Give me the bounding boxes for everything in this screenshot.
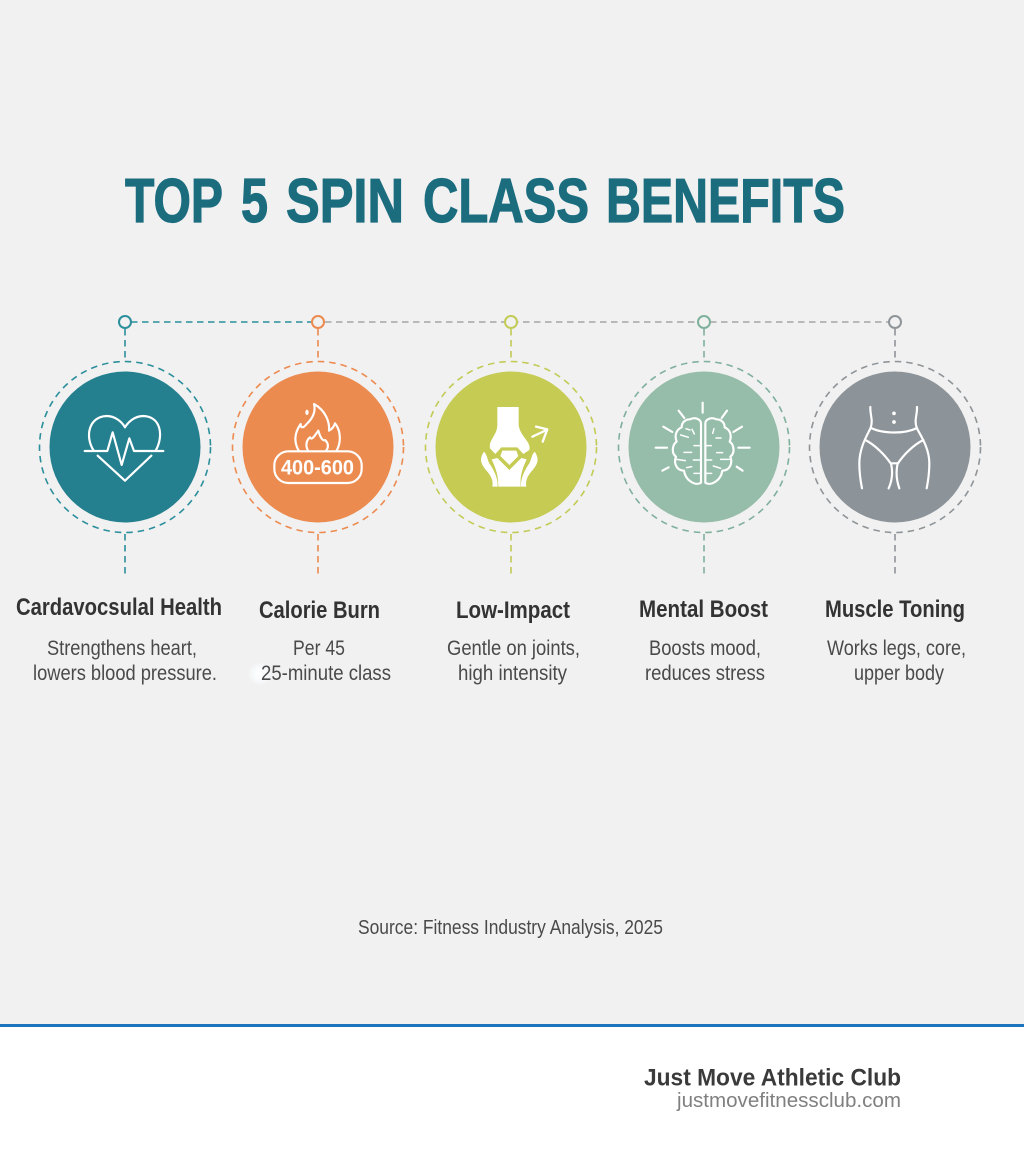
icon: brain with rays [656,403,750,484]
description [827,637,966,685]
description [248,637,391,686]
panel: mental boost [618,316,790,685]
timeline node [312,316,324,328]
description: 25-minute class [261,662,391,685]
panel: cardiovascular health [16,316,222,685]
description [645,637,765,685]
panel: muscle toning [810,316,980,685]
title: 5 [241,167,268,236]
heading: Mental Boost [639,596,768,623]
description: Gentle on joints, [447,637,580,660]
title: TOP [125,167,223,236]
timeline node [889,316,901,328]
icon: flame with calorie badge: 400-600 [281,455,354,479]
heading: Low-Impact [456,597,570,624]
title: SPIN [286,167,404,236]
icon: waist and hips [859,407,929,488]
title: CLASS [423,167,589,236]
title [125,167,845,236]
icon: knee joint with arrow [481,407,547,487]
description: Strengthens heart, [47,637,197,660]
club name: Just Move Athletic Club [644,1064,901,1092]
timeline node [698,316,710,328]
heading: Calorie Burn [259,597,380,624]
panel: calorie burn [232,316,404,686]
icon: flame with calorie badge [274,404,362,483]
heading: Cardavocsulal Health [16,594,222,621]
panel: low-impact [426,316,596,685]
description: upper body [854,662,944,685]
description: reduces stress [645,662,765,685]
description: Works legs, core, [827,637,966,660]
icon: heart with pulse [85,416,163,481]
description: lowers blood pressure. [33,662,217,685]
title: BENEFITS [606,167,845,236]
footer [0,1024,1024,1154]
timeline connector [131,321,889,323]
website: justmovefitnessclub.com [676,1090,901,1112]
description: Boosts mood, [649,637,761,660]
description [447,637,580,685]
description: high intensity [458,662,567,685]
heading: Muscle Toning [825,596,965,623]
timeline node [119,316,131,328]
timeline node [505,316,517,328]
source note: Source: Fitness Industry Analysis, 2025 [358,916,663,939]
description [33,637,217,685]
description: Per 45 [293,637,345,660]
